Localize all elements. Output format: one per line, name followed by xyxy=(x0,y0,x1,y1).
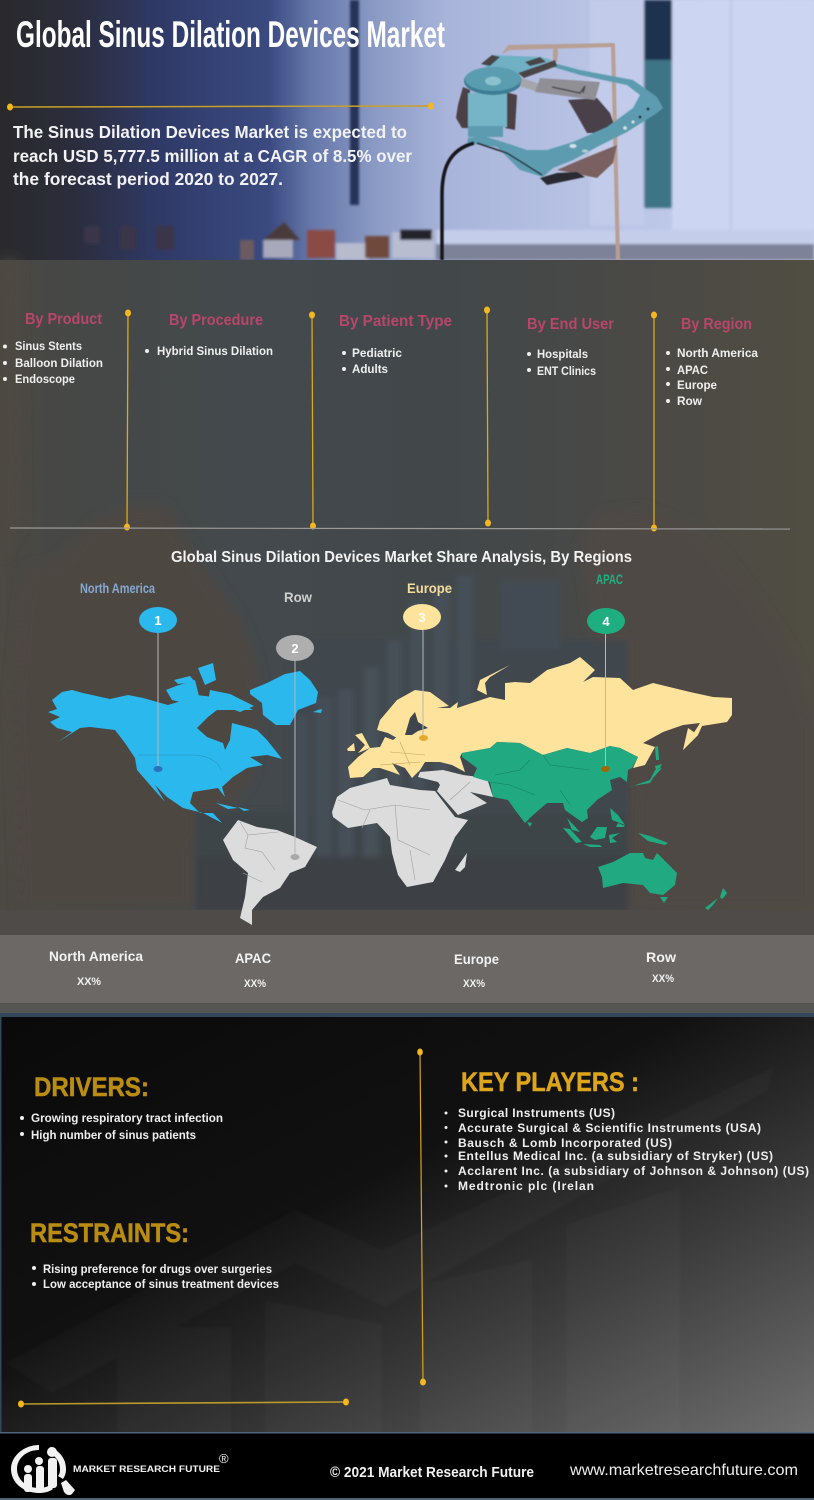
panel: hero header xyxy=(0,0,814,260)
map label: Europe: Europe xyxy=(407,580,452,596)
map region: Asia Pacific xyxy=(462,742,727,910)
map chart heading: Global Sinus Dilation Devices Market Share Analysis, By Regions xyxy=(171,549,632,566)
heading: key players: KEY PLAYERS : xyxy=(461,1067,639,1097)
callout pin: Row: 2 xyxy=(291,641,299,656)
logo wordmark: MARKET RESEARCH FUTURE xyxy=(73,1464,220,1475)
map label: North America: North America xyxy=(80,580,155,596)
region share: APAC: APAC xyxy=(235,950,271,966)
panel: By Region xyxy=(666,316,759,408)
world map xyxy=(48,657,732,925)
panel: By Region: By Region xyxy=(681,316,752,333)
copyright: © 2021 Market Research Future xyxy=(330,1464,534,1481)
map region: Europe and Russia xyxy=(347,657,732,778)
panel: By Patient Type: Adults xyxy=(352,364,388,376)
callout pin: Europe xyxy=(403,604,441,741)
panel: By Patient Type: By Patient Type xyxy=(339,313,452,330)
panel: drivers, restraints and key players xyxy=(0,1013,814,1433)
callout pin: APAC xyxy=(587,608,625,772)
column dividers xyxy=(124,306,657,532)
callout pin: Row xyxy=(276,635,314,860)
callout pin: North America: 1 xyxy=(154,613,162,628)
decorative bar chart backdrop xyxy=(196,575,628,910)
map region: North America xyxy=(48,663,322,823)
registered mark: ® xyxy=(219,1451,229,1466)
list: key players: Entellus Medical Inc. (a subsidiary of Stryker) (US) xyxy=(458,1149,773,1163)
intro paragraph: The Sinus Dilation Devices Market is expected to xyxy=(13,122,407,142)
panel: By Product: By Product xyxy=(25,311,103,328)
list: key players: Medtronic plc (Irelan xyxy=(458,1179,594,1193)
region share: Row: XX% xyxy=(652,973,674,985)
panel: By Region: Row xyxy=(677,396,702,408)
panel: By Region: Europe xyxy=(677,380,717,392)
region share: Europe xyxy=(454,951,499,990)
panel: By End User xyxy=(527,316,614,378)
region share: APAC: XX% xyxy=(244,978,266,990)
region share: Row xyxy=(646,949,676,985)
panel: By Region: APAC xyxy=(677,365,708,377)
region share: Europe: XX% xyxy=(463,978,485,990)
intro paragraph: the forecast period 2020 to 2027. xyxy=(13,169,283,189)
list: key players: Accurate Surgical & Scientific Instruments (USA) xyxy=(458,1121,761,1135)
panel: By End User: ENT Clinics xyxy=(537,366,596,378)
panel: segmentation and map background xyxy=(0,260,814,1015)
callout pin: North America xyxy=(139,607,177,772)
panel: By End User: Hospitals xyxy=(537,349,588,361)
vertical gold divider xyxy=(417,1048,426,1386)
intro paragraph: reach USD 5,777.5 million at a CAGR of 8.5% over xyxy=(13,146,412,166)
icon: market research future logo xyxy=(11,1445,75,1495)
icon: sinus dilation headset device xyxy=(442,43,663,260)
panel: By Product xyxy=(3,311,103,386)
list: restraints xyxy=(32,1262,279,1291)
divider with gold end dots xyxy=(7,102,434,110)
panel: footer xyxy=(0,1432,814,1500)
panel: By Patient Type: Pediatric xyxy=(352,348,403,360)
region share: Row: Row xyxy=(646,949,676,965)
region share: North America: North America xyxy=(49,948,143,964)
list: key players xyxy=(444,1106,809,1193)
panel: By End User: By End User xyxy=(527,316,614,333)
list: key players: Bausch & Lomb Incorporated (US) xyxy=(458,1136,672,1150)
intro paragraph xyxy=(13,122,412,189)
panel: region share strip background xyxy=(0,935,814,1003)
list: key players: Surgical Instruments (US) xyxy=(458,1106,615,1120)
list: restraints: Low acceptance of sinus treatment devices xyxy=(43,1277,279,1291)
icon: bottles on the shelf xyxy=(84,222,434,260)
title: Global Sinus Dilation Devices Market xyxy=(16,14,445,55)
list: key players: Acclarent Inc. (a subsidiary of Johnson & Johnson) (US) xyxy=(458,1164,809,1178)
website: www.marketresearchfuture.com xyxy=(569,1462,798,1479)
panel: By Procedure: Hybrid Sinus Dilation xyxy=(157,346,273,358)
region share: North America xyxy=(49,948,143,988)
horizontal gold divider xyxy=(18,1398,349,1408)
panel: By Patient Type xyxy=(339,313,452,376)
panel: By Procedure: By Procedure xyxy=(169,312,263,329)
region share: APAC xyxy=(235,950,271,990)
panel: By Product: Sinus Stents xyxy=(15,341,82,353)
list: drivers xyxy=(20,1111,223,1142)
list: drivers: High number of sinus patients xyxy=(31,1128,196,1142)
map region: Rest of world xyxy=(223,770,493,925)
map label: APAC: APAC xyxy=(596,571,623,587)
region share: North America: XX% xyxy=(77,976,101,988)
decorative arrow chart backdrop xyxy=(5,1067,774,1433)
callout pin: APAC: 4 xyxy=(602,614,610,629)
panel: By Region: North America xyxy=(677,348,759,360)
panel: By Procedure xyxy=(145,312,273,358)
callout pin: Europe: 3 xyxy=(418,610,426,625)
heading: restraints: RESTRAINTS: xyxy=(30,1218,189,1248)
list: restraints: Rising preference for drugs over surgeries xyxy=(43,1262,272,1276)
panel: By Product: Endoscope xyxy=(15,374,75,386)
region share: Europe: Europe xyxy=(454,951,499,967)
panel: By Product: Balloon Dilation xyxy=(15,358,103,370)
heading: drivers: DRIVERS: xyxy=(34,1072,149,1102)
list: drivers: Growing respiratory tract infection xyxy=(31,1111,223,1125)
map label: Row: Row xyxy=(284,589,312,605)
